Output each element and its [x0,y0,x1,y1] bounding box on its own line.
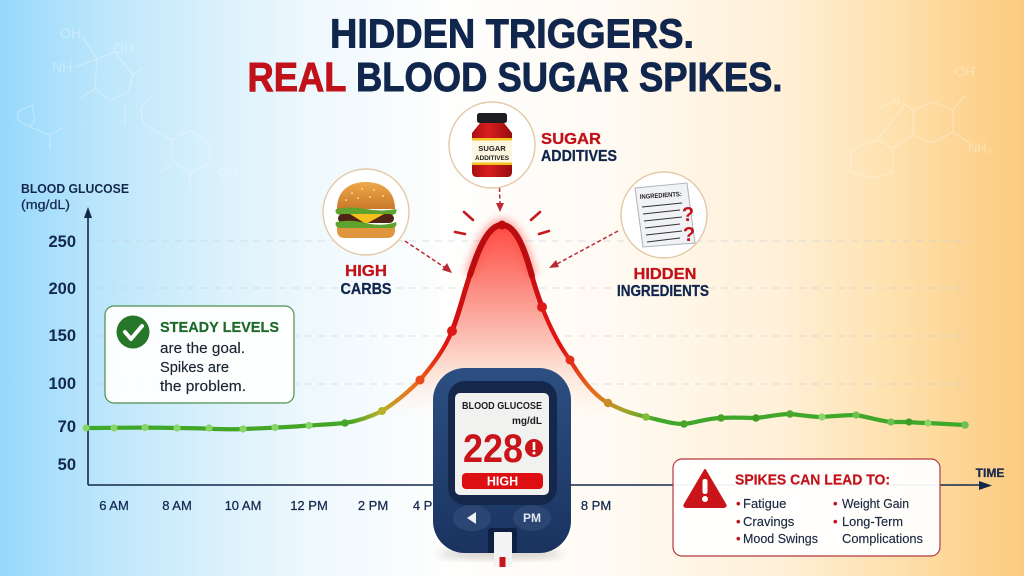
x axis labels: 10 AM [225,498,261,513]
molecule watermark left [18,25,238,188]
icon: ingredients sheet: ? [683,224,695,246]
label: sugar additives [541,131,617,165]
label: hidden ingredients [617,266,709,300]
effects list: • [833,496,838,511]
effects list: Long-Term [842,514,903,529]
callout: steady levels [105,306,294,403]
y axis tick labels: 100 [48,375,76,393]
x axis labels: 6 AM [99,498,129,513]
arrows: triggers to spike [405,188,618,273]
x axis labels: TIME [976,466,1004,480]
effects list: Fatigue [743,496,786,511]
y axis tick labels: 250 [48,233,76,251]
callout heading: SPIKES CAN LEAD TO: [735,472,890,488]
meter screen: 228 [463,427,523,471]
label: sugar additives: ADDITIVES [541,148,617,165]
callout text: are the goal. [160,340,245,357]
title [248,10,782,100]
icon: burger [336,182,396,238]
molecule watermark left: OH [113,40,134,56]
panel: sugar additives [449,102,617,188]
gridlines [84,241,970,384]
test strip [488,528,517,567]
x axis labels: 12 PM [290,498,328,513]
title: HIDDEN TRIGGERS. [330,10,694,56]
effects list: Mood Swings [743,531,818,546]
icon: ingredients sheet: ? [682,204,694,226]
callout text [160,319,279,395]
callout text: the problem. [160,378,246,395]
y axis tick labels: 50 [58,456,76,474]
effects list: • [736,496,741,511]
y axis tick labels: 200 [48,280,76,298]
molecule watermark right: N [893,96,900,107]
icon: warning triangle [684,470,726,507]
x axis labels: 8 PM [581,498,611,513]
meter screen: mg/dL [512,416,542,427]
panel: hidden ingredients [617,172,709,300]
y axis tick labels: 70 [58,418,76,436]
x axis labels: 2 PM [358,498,388,513]
y axis tick labels: 150 [48,327,76,345]
title: REAL BLOOD SUGAR SPIKES. [248,54,782,100]
meter screen: HIGH [487,474,518,488]
icon: ingredients sheet: INGREDIENTS: [640,191,682,201]
icon: ingredients sheet [635,183,695,247]
curve data points [82,220,969,433]
label: hidden ingredients: INGREDIENTS [617,283,709,300]
icon: sugar additives jar: ADDITIVES [475,155,510,162]
label: high carbs: HIGH [345,263,387,280]
y axis title: BLOOD GLUCOSE [21,181,129,196]
x axis labels: 8 AM [162,498,192,513]
spike area fill [382,224,608,415]
effects list: Cravings [743,514,795,529]
y axis tick labels [48,233,76,474]
icon: check mark [116,316,150,348]
glucose meter [433,368,571,567]
molecule watermark left: OH [218,165,238,180]
effects list: • [736,531,741,546]
molecule watermark left: OH [60,25,81,41]
spike burst marks [455,212,549,234]
icon: sugar additives jar [472,113,512,177]
meter screen [455,393,549,495]
molecule watermark right [850,64,992,178]
label: sugar additives: SUGAR [541,131,601,148]
effects list: • [736,514,741,529]
axes [84,207,992,490]
panel: high carbs [323,169,409,298]
meter buttons: PM [523,511,541,525]
y axis title: (mg/dL) [21,197,70,212]
molecule watermark right: OH [955,64,974,79]
glucose curve [82,220,969,433]
callout: spikes can lead to [673,459,940,556]
effects list: • [833,514,838,529]
callout text: STEADY LEVELS [160,319,279,336]
y axis title [21,181,129,212]
meter screen: BLOOD GLUCOSE [462,401,542,412]
effects list: Complications [842,531,923,546]
meter buttons [453,505,551,531]
label: hidden ingredients: HIDDEN [634,266,696,283]
effects list: Weight Gain [842,496,909,511]
x axis labels [99,466,1004,513]
label: high carbs: CARBS [340,281,392,298]
callout text: Spikes are [160,359,229,376]
icon: sugar additives jar: SUGAR [478,144,506,153]
label: high carbs [340,263,392,298]
molecule watermark right: NH₂ [968,140,992,155]
molecule watermark left: NH [52,59,72,75]
effects list [736,496,923,546]
x axis labels: 4 PM [413,498,443,513]
